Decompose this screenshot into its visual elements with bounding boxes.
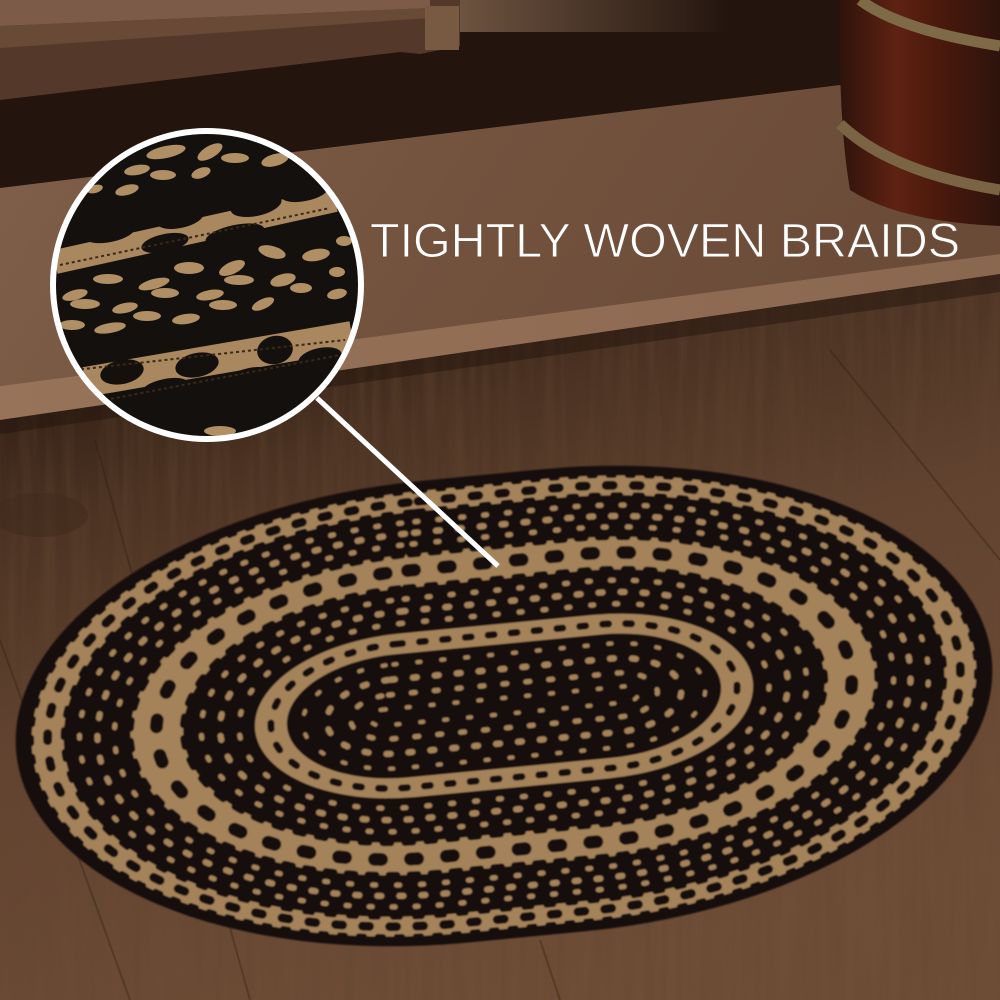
lens: black blotches on bands <box>90 190 342 387</box>
lens: dark stitched seam lines <box>60 208 345 400</box>
lens: upper tan band <box>55 200 335 262</box>
lens: tan stitch dots <box>59 140 352 436</box>
rug braid pattern <box>11 440 997 972</box>
lens: white ring <box>53 131 361 439</box>
braided oval rug <box>0 428 1000 984</box>
magnified detail lens <box>50 128 364 442</box>
barrel <box>840 0 1000 226</box>
wooden floor background <box>0 280 1000 1000</box>
rug base bands <box>0 428 1000 984</box>
lower shelf <box>0 85 1000 434</box>
callout text: TIGHTLY WOVEN BRAIDS <box>370 215 960 268</box>
dark back wall <box>0 0 860 200</box>
lens: lower tan band <box>85 336 352 382</box>
callout leader line <box>317 398 498 566</box>
upper shelf <box>0 0 730 100</box>
